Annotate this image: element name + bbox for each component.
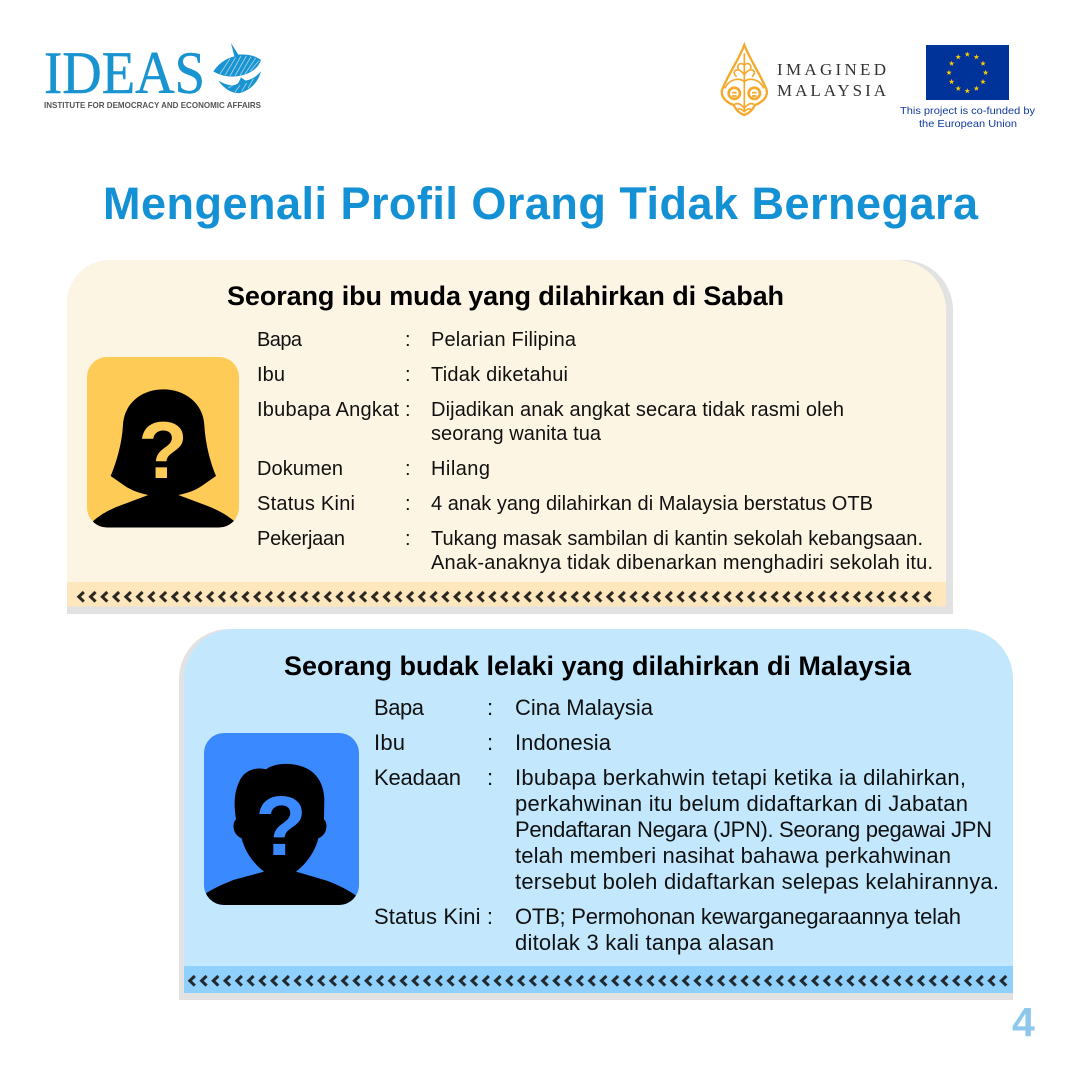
icon: woman silhouette with question mark xyxy=(87,357,239,530)
row: Pekerjaan: : xyxy=(405,528,411,550)
row: Dokumen xyxy=(257,458,490,480)
panel: young mother profile xyxy=(67,260,953,614)
panel: boy profile xyxy=(179,629,1013,1000)
card heading: Seorang ibu muda yang dilahirkan di Sabah xyxy=(227,281,784,311)
row: Bapa: Bapa xyxy=(374,695,425,720)
card heading: Seorang budak lelaki yang dilahirkan di Malaysia xyxy=(284,651,912,681)
decorative chevron strip xyxy=(67,582,946,606)
row: Ibubapa Angkat: : xyxy=(405,399,411,421)
row: Keadaan: Ibubapa berkahwin tetapi ketika ia dilahirkan, xyxy=(515,765,966,790)
row: Status Kini: Status Kini xyxy=(257,493,355,515)
row: Bapa xyxy=(257,329,577,351)
row: Dokumen: Hilang xyxy=(431,458,490,480)
row: Status Kini xyxy=(374,904,961,955)
logo: Imagined Malaysia: MALAYSIA xyxy=(777,81,887,100)
IDEAS tagline: INSTITUTE FOR DEMOCRACY AND ECONOMIC AFFAIRS xyxy=(44,100,261,110)
row: Ibu: Ibu xyxy=(257,364,285,386)
row: Bapa: Pelarian Filipina xyxy=(431,329,577,351)
card background xyxy=(67,260,946,606)
row: Keadaan: perkahwinan itu belum didaftarkan di Jabatan xyxy=(515,791,968,816)
row: Ibubapa Angkat: seorang wanita tua xyxy=(431,423,602,445)
EU stars xyxy=(946,52,988,93)
row: Status Kini: : xyxy=(405,493,411,515)
icon: woman silhouette with question mark: ? xyxy=(138,406,188,496)
row: Bapa xyxy=(374,695,654,720)
row: Status Kini: ditolak 3 kali tanpa alasan xyxy=(515,930,774,955)
row: Bapa: Cina Malaysia xyxy=(515,695,654,720)
decorative chevron strip xyxy=(184,966,1013,993)
row: Keadaan: telah memberi nasihat bahawa perkahwinan xyxy=(515,843,951,868)
row: Keadaan: : xyxy=(487,765,493,790)
row: Ibubapa Angkat: Ibubapa Angkat xyxy=(257,399,399,421)
row: Keadaan: Pendaftaran Negara (JPN). Seorang pegawai JPN xyxy=(515,817,992,842)
row: Bapa: : xyxy=(487,695,493,720)
icon: IDEAS bird xyxy=(213,43,261,93)
row: Ibubapa Angkat xyxy=(257,399,844,445)
logo: EU flag: the European Union xyxy=(919,118,1017,130)
EU flag rectangle xyxy=(926,45,1009,100)
row: Ibu xyxy=(374,730,612,755)
card shadow xyxy=(67,260,953,614)
icon: boy silhouette with question mark: ? xyxy=(255,779,307,873)
profile details xyxy=(257,329,933,574)
profile details xyxy=(374,695,999,955)
row: Keadaan: tersebut boleh didaftarkan selepas kelahirannya. xyxy=(515,869,999,894)
row: Dokumen: Dokumen xyxy=(257,458,343,480)
row: Ibu: Indonesia xyxy=(515,730,612,755)
logo: EU flag xyxy=(900,45,1036,130)
row: Ibubapa Angkat: Dijadikan anak angkat secara tidak rasmi oleh xyxy=(431,399,844,421)
logo: Imagined Malaysia xyxy=(722,45,887,115)
row: Ibu: Ibu xyxy=(374,730,405,755)
icon: wayang puppet xyxy=(722,45,767,115)
logo: IDEAS xyxy=(44,40,261,110)
row: Ibu xyxy=(257,364,568,386)
row: Pekerjaan: Pekerjaan xyxy=(257,528,345,550)
card shadow xyxy=(179,629,1013,1000)
row: Pekerjaan: Tukang masak sambilan di kantin sekolah kebangsaan. xyxy=(431,528,923,550)
icon: boy silhouette with question mark xyxy=(203,733,359,907)
row: Keadaan: Keadaan xyxy=(374,765,461,790)
Imagined Malaysia wordmark: IMAGINED xyxy=(777,60,886,79)
title: Mengenali Profil Orang Tidak Bernegara xyxy=(103,178,979,229)
card background xyxy=(184,629,1013,993)
row: Pekerjaan: Anak-anaknya tidak dibenarkan menghadiri sekolah itu. xyxy=(431,552,933,574)
row: Bapa: : xyxy=(405,329,411,351)
row: Status Kini: OTB; Permohonan kewarganegaraannya telah xyxy=(515,904,961,929)
row: Pekerjaan xyxy=(257,528,933,574)
EU co-funding note: This project is co-funded by xyxy=(900,105,1036,117)
row: Ibu: : xyxy=(405,364,411,386)
row: Dokumen: : xyxy=(405,458,411,480)
row: Bapa: Bapa xyxy=(257,329,303,351)
row: Keadaan xyxy=(374,765,999,894)
page number: 4 xyxy=(1012,999,1035,1045)
IDEAS wordmark: IDEAS xyxy=(44,40,205,106)
row: Ibu: : xyxy=(487,730,493,755)
row: Status Kini: Status Kini : xyxy=(374,904,493,929)
row: Ibu: Tidak diketahui xyxy=(431,364,568,386)
row: Status Kini: 4 anak yang dilahirkan di Malaysia berstatus OTB xyxy=(431,493,873,515)
